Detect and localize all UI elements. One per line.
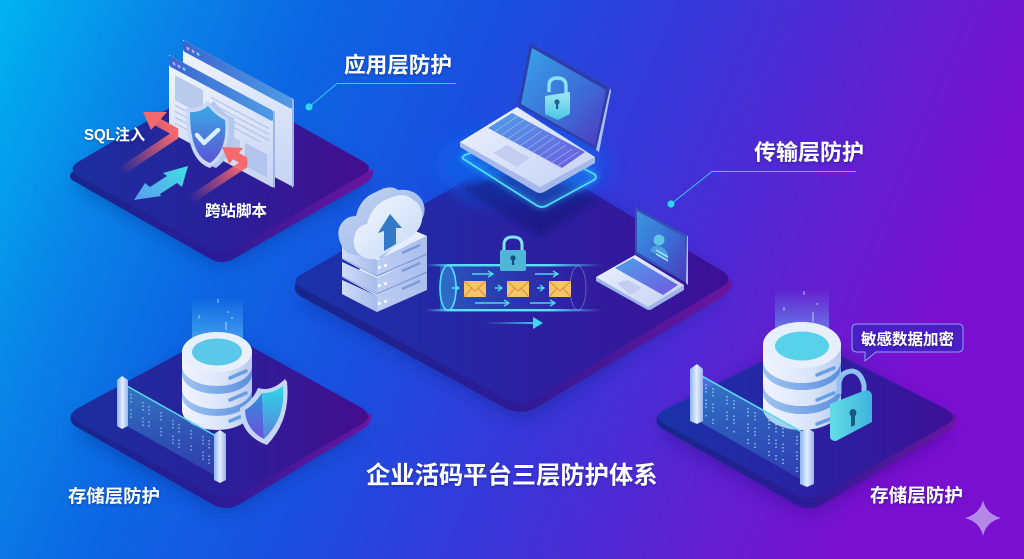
glowing plate under laptop [462, 135, 596, 207]
heading: application layer: 应用层防护 [344, 52, 452, 78]
callout: sensitive data encryption: 敏感数据加密 [861, 330, 955, 348]
callout: sensitive data encryption [852, 324, 963, 361]
icon: browser windows [169, 40, 294, 188]
icon: left data fence and database [117, 297, 288, 483]
flow arrows in tunnel [452, 271, 558, 306]
fence posts [690, 364, 703, 424]
panel: storage layer platform right [657, 342, 956, 508]
icon: attack arrow cross-site script [190, 147, 243, 200]
icon: sparkle [965, 500, 1001, 536]
padlock [830, 371, 872, 441]
padlock on screen [545, 78, 570, 120]
light beam [775, 288, 829, 338]
label: SQL injection: SQL注入 [84, 125, 145, 144]
data glass panel [700, 375, 802, 480]
padlock above tunnel [500, 237, 526, 271]
icon: right data fence, database and lock [690, 288, 872, 487]
data glass panel [127, 386, 216, 476]
panel: storage layer platform left [71, 334, 371, 508]
database cylinder [763, 322, 841, 430]
shield [240, 379, 288, 445]
title: 企业活码平台三层防护体系 [366, 462, 658, 490]
cloud [338, 187, 425, 259]
label: cross-site script: 跨站脚本 [205, 202, 268, 220]
light beam [192, 297, 243, 342]
label: storage layer right: 存储层防护 [870, 485, 963, 506]
icon: arrow under tunnel [484, 317, 543, 329]
icon: attack arrow SQL injection [120, 112, 174, 172]
icon: shield with check [186, 101, 235, 168]
icon: encrypted tunnel [426, 237, 602, 311]
panel: application layer platform [70, 84, 373, 262]
heading: transmission layer: 传输层防护 [754, 140, 864, 165]
callout line: transmission layer [667, 172, 856, 208]
icon: small laptop [596, 207, 688, 310]
envelopes [464, 281, 571, 297]
light haze at platform top [435, 127, 605, 203]
icon: double-headed arrow [134, 166, 188, 200]
icon: large laptop [460, 43, 611, 237]
label: storage layer left: 存储层防护 [68, 486, 160, 506]
user icon on screen [650, 234, 668, 261]
panel: transmission layer platform [295, 127, 732, 415]
fence posts [117, 376, 128, 429]
shadow under laptop [460, 170, 597, 237]
icon: server stack with cloud [338, 187, 427, 312]
database cylinder [182, 332, 252, 430]
callout line: application layer [305, 84, 456, 111]
